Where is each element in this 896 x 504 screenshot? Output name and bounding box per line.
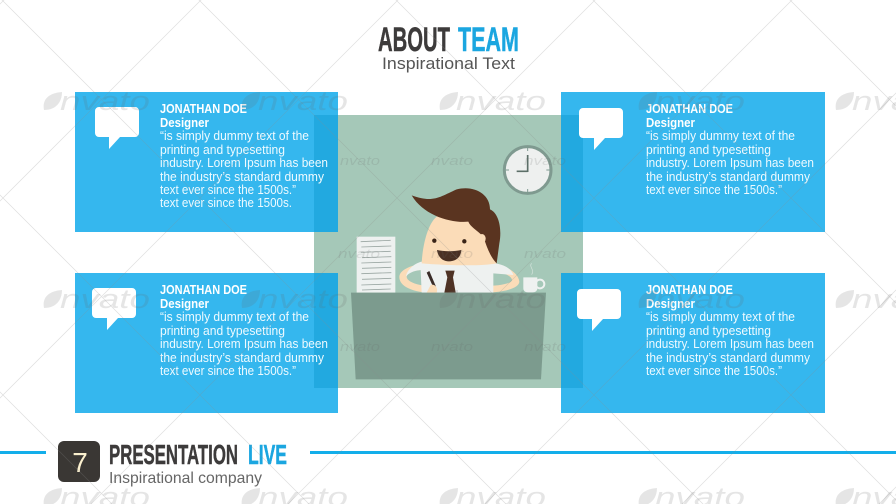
panel text: “is simply dummy text of the	[646, 128, 795, 143]
panel text: text ever since the 1500s.”	[160, 182, 296, 197]
footer brand: PRESENTATION	[109, 439, 238, 470]
panel text: text ever since the 1500s.”	[646, 363, 782, 378]
panel: top right	[561, 92, 825, 232]
panel text: industry. Lorem Ipsum has been	[646, 155, 814, 170]
title: TEAM	[458, 21, 519, 59]
man	[399, 188, 519, 293]
panel text: text ever since the 1500s.”	[646, 182, 782, 197]
watermarks: nvato	[431, 246, 473, 261]
panel: bottom right	[561, 273, 825, 413]
footer brand	[109, 439, 287, 487]
watermarks: nvato	[655, 86, 745, 116]
panel text: “is simply dummy text of the	[160, 309, 309, 324]
watermarks: nvato	[524, 153, 566, 168]
desk	[351, 293, 546, 379]
watermarks: nvato	[340, 153, 380, 168]
panel text: “is simply dummy text of the	[646, 309, 795, 324]
watermarks: nvato	[338, 246, 380, 261]
page number badge: 7	[72, 447, 88, 478]
panel text: JONATHAN DOE	[160, 282, 247, 297]
icon: speech bubble	[579, 108, 623, 150]
footer brand: Inspirational company	[109, 470, 262, 487]
sheet of paper	[357, 237, 395, 293]
watermarks: nvato	[524, 246, 566, 261]
watermarks	[44, 86, 896, 504]
panel text: text ever since the 1500s.”	[160, 363, 296, 378]
panel text: Designer	[646, 115, 695, 130]
watermarks: nvato	[456, 284, 546, 314]
panel text: the industry’s standard dummy	[646, 350, 810, 365]
panel text: text ever since the 1500s.	[160, 195, 292, 210]
panel text	[646, 282, 814, 378]
panel text: Designer	[160, 296, 209, 311]
footer rule	[0, 451, 896, 454]
watermarks: nvato	[431, 153, 473, 168]
watermarks: nvato	[456, 86, 546, 116]
panel text: industry. Lorem Ipsum has been	[160, 336, 328, 351]
panel: bottom left	[75, 273, 338, 413]
icon: speech bubble	[577, 289, 621, 331]
coffee cup	[523, 263, 544, 292]
watermarks: nvato	[524, 339, 566, 354]
icon: speech bubble	[95, 107, 139, 149]
panel text	[160, 282, 328, 378]
panel text: JONATHAN DOE	[646, 101, 733, 116]
watermarks: nvato	[258, 86, 348, 116]
watermarks: nvato	[60, 86, 150, 116]
panel text: the industry’s standard dummy	[160, 169, 324, 184]
panel text: printing and typesetting	[160, 323, 285, 338]
panel text	[160, 101, 328, 210]
panel text: JONATHAN DOE	[160, 101, 247, 116]
panel text: the industry’s standard dummy	[160, 350, 324, 365]
watermarks: nvato	[655, 284, 745, 314]
watermarks: nvato	[60, 284, 150, 314]
panel text: printing and typesetting	[160, 142, 285, 157]
watermarks: nvato	[431, 339, 473, 354]
panel text: JONATHAN DOE	[646, 282, 733, 297]
panel text: Designer	[646, 296, 695, 311]
panel text: “is simply dummy text of the	[160, 128, 309, 143]
subtitle: Inspirational Text	[382, 54, 515, 73]
panel text: printing and typesetting	[646, 323, 771, 338]
panel text: the industry’s standard dummy	[646, 169, 810, 184]
page number badge	[58, 441, 100, 482]
icon: wall clock	[504, 147, 551, 193]
footer brand: LIVE	[248, 439, 287, 470]
watermarks: nvato	[340, 339, 380, 354]
panel text: industry. Lorem Ipsum has been	[646, 336, 814, 351]
panel text: industry. Lorem Ipsum has been	[160, 155, 328, 170]
panel: top left	[75, 92, 338, 232]
panel text: Designer	[160, 115, 209, 130]
title: ABOUT	[378, 21, 450, 59]
illustration: man at desk	[314, 115, 583, 388]
panel text	[646, 101, 814, 197]
panel text: printing and typesetting	[646, 142, 771, 157]
icon: speech bubble	[92, 288, 136, 330]
watermarks: nvato	[258, 284, 348, 314]
